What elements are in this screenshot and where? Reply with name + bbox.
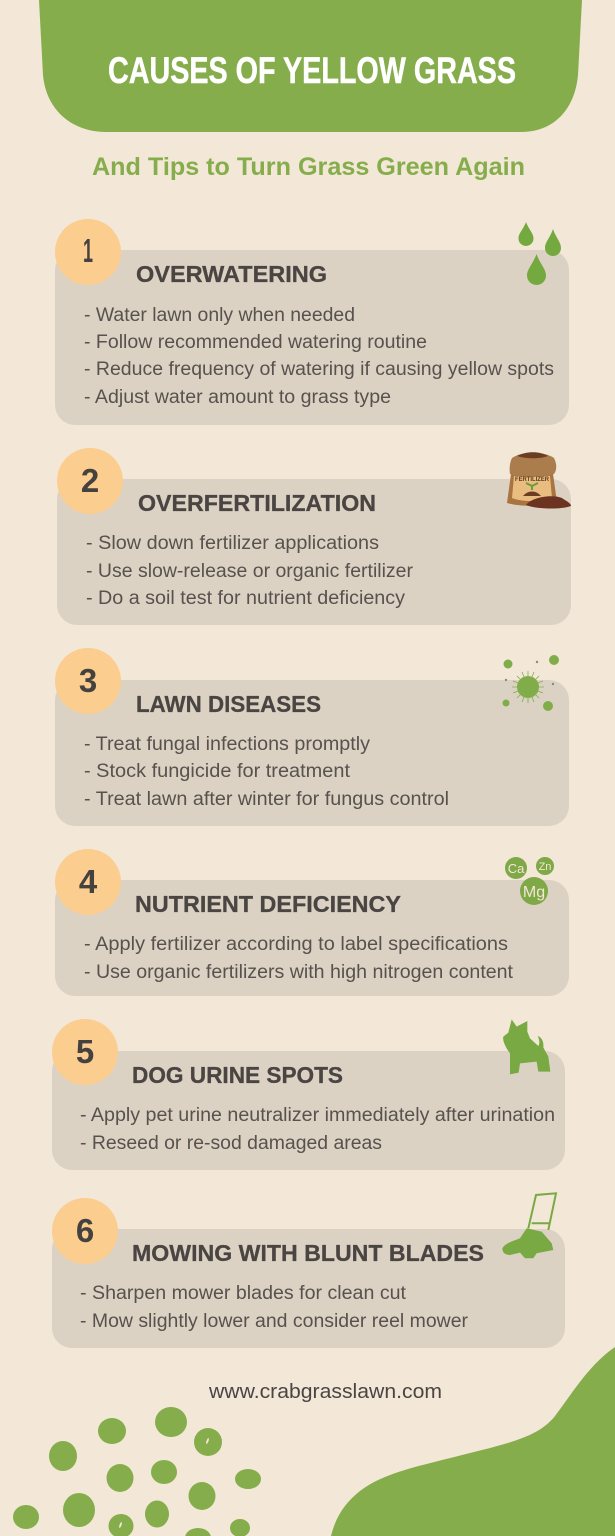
icon: virus particles bbox=[502, 655, 559, 711]
tips: mowing with blunt blades: - Sharpen mower blades for clean cut bbox=[80, 1283, 407, 1304]
icon: minerals bbox=[505, 857, 554, 905]
heading: lawn diseases: LAWN DISEASES bbox=[136, 691, 321, 717]
tips: overwatering: - Follow recommended watering routine bbox=[84, 332, 427, 353]
icon: minerals: Ca bbox=[508, 861, 525, 876]
tips: lawn diseases bbox=[84, 734, 449, 810]
panel: lawn diseases bbox=[55, 648, 569, 826]
tips: overfertilization: - Use slow-release or organic fertilizer bbox=[86, 561, 414, 582]
heading: nutrient deficiency: NUTRIENT DEFICIENCY bbox=[135, 891, 401, 917]
tips: dog urine spots bbox=[80, 1105, 555, 1154]
website url: www.crabgrasslawn.com bbox=[208, 1381, 442, 1403]
number badge 1: 1 bbox=[83, 232, 93, 269]
tips: mowing with blunt blades bbox=[80, 1283, 469, 1332]
tips: overwatering: - Adjust water amount to grass type bbox=[84, 387, 391, 408]
tips: overfertilization: - Do a soil test for nutrient deficiency bbox=[86, 588, 406, 609]
panel: mowing with blunt blades bbox=[52, 1193, 565, 1348]
icon: fertilizer bag bbox=[507, 452, 571, 509]
tips: lawn diseases: - Treat fungal infections promptly bbox=[84, 734, 371, 755]
number badge 6: 6 bbox=[76, 1212, 94, 1249]
number badge 5 bbox=[52, 1019, 118, 1085]
tips: nutrient deficiency: - Use organic fertilizers with high nitrogen content bbox=[84, 962, 514, 983]
heading: overwatering: OVERWATERING bbox=[136, 261, 327, 287]
number badge 3 bbox=[55, 648, 121, 714]
icon: fertilizer bag: FERTILIZER bbox=[515, 477, 550, 483]
number badge 4: 4 bbox=[79, 863, 98, 900]
decoration: green corner blob bbox=[331, 1347, 615, 1536]
tips: mowing with blunt blades: - Mow slightly lower and consider reel mower bbox=[80, 1311, 469, 1332]
header banner bbox=[39, 0, 582, 132]
icon: dog bbox=[503, 1019, 550, 1074]
tips: dog urine spots: - Apply pet urine neutralizer immediately after urination bbox=[80, 1105, 555, 1126]
tips: lawn diseases: - Treat lawn after winter for fungus control bbox=[84, 789, 449, 810]
panel: nutrient deficiency bbox=[55, 849, 569, 996]
tips: lawn diseases: - Stock fungicide for treatment bbox=[84, 761, 351, 782]
icon: minerals: Mg bbox=[523, 884, 545, 901]
tips: overwatering bbox=[84, 305, 554, 408]
number badge 1 bbox=[55, 219, 121, 285]
icon: minerals: Zn bbox=[539, 861, 551, 873]
heading: mowing with blunt blades: MOWING WITH BLUNT BLADES bbox=[132, 1240, 484, 1266]
tips: overwatering: - Reduce frequency of watering if causing yellow spots bbox=[84, 359, 554, 380]
tips: overfertilization bbox=[86, 533, 414, 609]
tips: overwatering: - Water lawn only when needed bbox=[84, 305, 355, 326]
icon: lawn mower bbox=[502, 1193, 556, 1258]
tips: overfertilization: - Slow down fertilizer applications bbox=[86, 533, 379, 554]
tips: nutrient deficiency bbox=[84, 934, 514, 983]
panel: overfertilization bbox=[57, 448, 571, 625]
icon: water drops bbox=[518, 222, 561, 285]
heading: overfertilization: OVERFERTILIZATION bbox=[138, 490, 376, 516]
number badge 4 bbox=[55, 849, 121, 915]
subtitle: And Tips to Turn Grass Green Again bbox=[92, 153, 525, 181]
number badge 5: 5 bbox=[76, 1033, 94, 1070]
panel: overwatering bbox=[55, 219, 569, 425]
number badge 6 bbox=[52, 1198, 118, 1264]
number badge 2: 2 bbox=[81, 462, 99, 499]
number badge 3: 3 bbox=[79, 662, 97, 699]
number badge 2 bbox=[57, 448, 123, 514]
panel: dog urine spots bbox=[52, 1019, 565, 1170]
tips: nutrient deficiency: - Apply fertilizer according to label specifications bbox=[84, 934, 508, 955]
tips: dog urine spots: - Reseed or re-sod damaged areas bbox=[80, 1133, 382, 1154]
decoration: green dots bbox=[13, 1407, 261, 1536]
heading: dog urine spots: DOG URINE SPOTS bbox=[132, 1062, 343, 1088]
